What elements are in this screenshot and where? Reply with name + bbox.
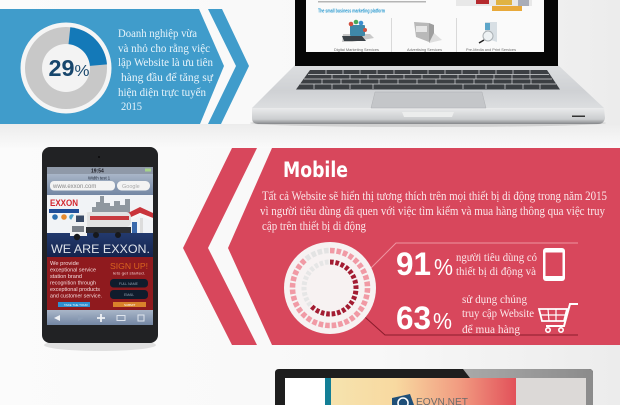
ad: red panel: TAKE THE TOUR — [64, 303, 88, 307]
monitor bezel — [275, 369, 593, 405]
laptop base — [252, 65, 604, 108]
ad: red panel: lets get started. — [113, 272, 145, 276]
text: blue statistic description: lập Website là ưu tiên — [118, 55, 213, 69]
donut chart: 29 percent: 29 — [48, 55, 74, 81]
ad body text: station brand — [50, 274, 82, 280]
ad: navy band with truck: WE ARE EXXON. — [51, 244, 150, 256]
browser chrome: Google — [122, 184, 140, 190]
text: mobile description: cập trên thiết bị di động — [262, 219, 367, 233]
text: blue statistic description — [118, 26, 213, 113]
ad: red panel: FULL NAME — [119, 282, 139, 286]
text: blue statistic description: hàng đầu để tăng sự — [121, 70, 213, 84]
collage of printed material — [456, 0, 532, 11]
donut chart: 29 percent: % — [74, 63, 90, 80]
laptop indicator — [572, 116, 585, 117]
service labels: Pre-Media and Print Services — [466, 48, 516, 52]
text: blue statistic description: 2015 — [121, 99, 142, 113]
donut chart: 29 percent — [20, 22, 112, 114]
ad: red panel: SUBMIT — [124, 303, 136, 307]
stat: 63 percent: % — [433, 308, 452, 334]
monitor gloss — [463, 369, 593, 405]
ad body text: and customer service. — [50, 294, 102, 300]
laptop screen bezel — [295, 0, 558, 66]
ad: red panel: EMAIL — [124, 293, 134, 297]
browser chrome: www.exxon.com — [52, 184, 96, 190]
ad: white header with logo — [47, 195, 153, 233]
service labels: Advertising Services — [407, 48, 442, 52]
browser chrome: Width test 1 — [88, 176, 111, 180]
monitor — [275, 369, 593, 405]
callout line: 63 percent — [357, 310, 578, 335]
ad: white header with logo: EXXON — [50, 198, 78, 209]
ad body text: recognition through — [50, 280, 96, 286]
text: 63 percent description: để mua hàng — [462, 322, 520, 336]
stat: 91 percent: 91 — [396, 246, 431, 282]
icon: magnifier on print — [479, 22, 497, 43]
browser chrome — [47, 167, 153, 195]
logo — [392, 394, 414, 405]
icon: digital marketing — [342, 20, 374, 42]
service labels: Digital Marketing Services — [334, 48, 379, 52]
blue chevron — [208, 9, 249, 124]
radial chart — [284, 242, 376, 334]
laptop shadow — [250, 119, 606, 127]
text: blue statistic description: hiện diện trực tuyến — [118, 85, 206, 99]
stat: 91 percent: % — [434, 254, 453, 280]
text: blue statistic description: và nhỏ cho rằng việc — [118, 41, 210, 55]
laptop trackpad — [371, 92, 486, 108]
tablet phone — [42, 147, 158, 351]
callout line: 91 percent — [371, 243, 578, 268]
stat: 63 percent — [396, 300, 452, 336]
text: 91 percent description: người tiêu dùng có — [456, 250, 537, 264]
ad body text — [50, 261, 102, 300]
laptop front edge — [252, 108, 605, 124]
text: 63 percent description: sử dụng chúng — [462, 292, 527, 306]
ad: red panel — [47, 257, 153, 310]
tanker truck — [84, 212, 131, 227]
ad body text: exceptional service — [50, 268, 96, 274]
heading: Mobile: Mobile — [283, 158, 348, 182]
red arrow banner — [228, 148, 620, 345]
icon: shopping cart — [539, 304, 578, 332]
laptop screen page — [306, 0, 544, 52]
ad body text: exceptional products — [50, 287, 100, 293]
icon: advertising newspaper — [414, 22, 442, 43]
browser toolbar — [47, 310, 153, 325]
laptop — [250, 0, 606, 127]
device body — [42, 147, 158, 343]
laptop keyboard — [296, 70, 560, 90]
text: 63 percent description: truy cập Website — [462, 306, 534, 320]
gas station canopy — [116, 207, 153, 223]
stat: 91 percent — [396, 246, 453, 282]
device shadow — [44, 339, 156, 351]
browser chrome: 19:54 — [91, 169, 104, 175]
text: mobile description — [260, 189, 607, 233]
text: blue statistic description: Doanh nghiệp vừa — [118, 26, 198, 40]
text: 91 percent description: thiết bị di động và — [456, 264, 537, 278]
skyline — [92, 196, 130, 216]
blue arrow banner — [0, 9, 224, 124]
sign up form: SIGN UP! — [110, 261, 148, 271]
panel: red mobile section — [183, 148, 620, 345]
icon: smartphone — [543, 248, 565, 281]
ad: navy band with truck — [47, 207, 153, 257]
text: 91 percent description — [456, 250, 537, 278]
laptop screen page: The small business marketing platform — [318, 8, 385, 14]
text: 63 percent description — [462, 292, 534, 336]
panel: blue website statistic — [0, 9, 249, 124]
service labels — [334, 48, 516, 52]
stat: 63 percent: 63 — [396, 300, 431, 336]
red chevron — [183, 148, 257, 345]
monitor screen — [285, 378, 586, 405]
front camera — [98, 156, 100, 158]
ad body text: We provide — [50, 261, 79, 267]
laptop notch — [402, 112, 454, 117]
